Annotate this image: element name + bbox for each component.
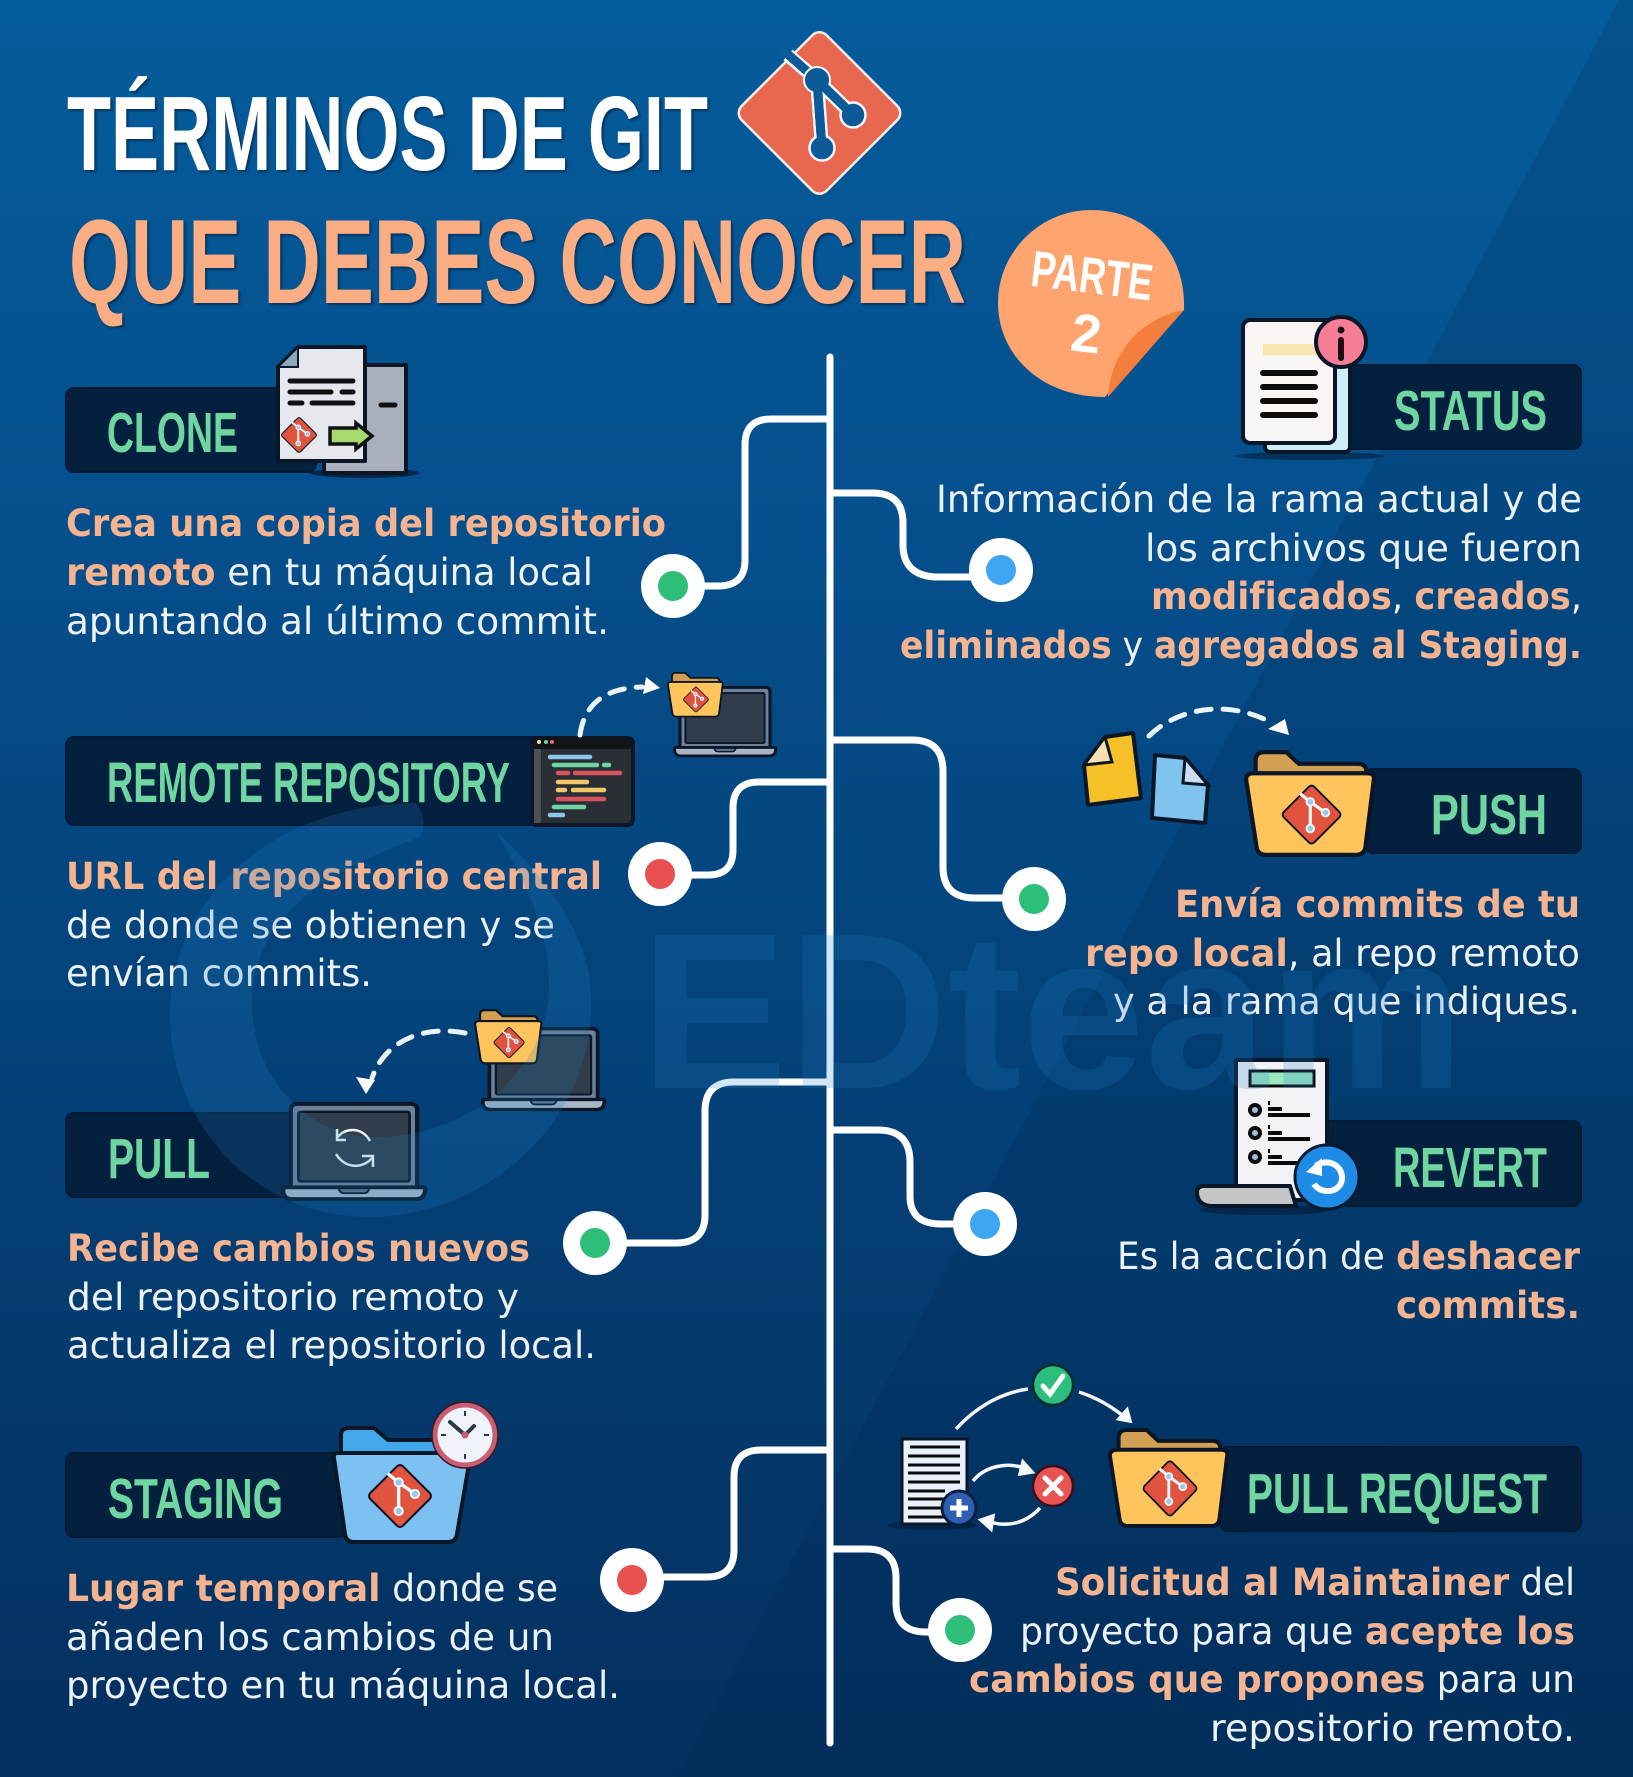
icon: pull request folder <box>1110 1430 1227 1526</box>
label: status: STATUS <box>1394 379 1547 443</box>
text: pull: del repositorio remoto y <box>67 1276 519 1319</box>
text: pull request <box>969 1561 1575 1750</box>
text: revert: commits. <box>1396 1284 1580 1327</box>
arrow: push <box>1149 709 1289 736</box>
icon: git logo <box>735 28 904 198</box>
icon: cross badge <box>1033 1466 1073 1506</box>
panel: clone <box>66 347 666 643</box>
title line 2: QUE DEBES CONOCER <box>69 195 966 329</box>
label: pull: PULL <box>108 1127 210 1191</box>
connector: clone <box>641 419 830 618</box>
text: clone: apuntando al último commit. <box>66 600 609 643</box>
label: staging: STAGING <box>108 1467 283 1531</box>
connector: status <box>830 493 1033 602</box>
label: remote repository: REMOTE REPOSITORY <box>107 751 510 815</box>
panel: push <box>1084 709 1581 1023</box>
icon: file yellow <box>1084 733 1141 805</box>
label: pull request <box>1220 1447 1581 1531</box>
text: status <box>900 478 1582 667</box>
text: clone: remoto en tu máquina local <box>66 551 593 594</box>
text: status: modificados, creados, <box>1151 575 1582 618</box>
text: staging: Lugar temporal donde se <box>66 1567 558 1610</box>
connector: pull request <box>830 1549 992 1662</box>
label: push <box>1365 769 1581 853</box>
sticker: parte 2: PARTE <box>1028 240 1156 311</box>
connector: staging <box>600 1450 830 1612</box>
watermark: EDteam <box>170 803 1465 1217</box>
text: pull request: proyecto para que acepte los <box>1020 1610 1575 1653</box>
sticker: parte 2: 2 <box>1068 303 1105 366</box>
icon: code window <box>532 738 633 825</box>
panel: remote repository <box>66 673 776 995</box>
text: status: eliminados y agregados al Staging. <box>900 624 1582 667</box>
text: pull: Recibe cambios nuevos <box>67 1227 530 1270</box>
connector: pull <box>563 1082 830 1275</box>
label: clone: CLONE <box>107 401 238 465</box>
text: revert <box>1117 1235 1581 1327</box>
icon: file blue <box>1152 755 1208 823</box>
text: push <box>1085 883 1580 1023</box>
panel: revert <box>1117 1060 1581 1327</box>
label: remote repository <box>66 737 546 825</box>
text: status: Información de la rama actual y de <box>936 478 1582 521</box>
text: remote repository: envían commits. <box>66 952 372 995</box>
icon: clone document and server <box>278 347 420 478</box>
label: revert <box>1320 1121 1581 1206</box>
arrows: review flow <box>956 1389 1130 1529</box>
connector: push <box>830 740 1066 931</box>
panel: pull <box>66 1010 604 1367</box>
panel: staging <box>66 1402 620 1707</box>
connector: revert <box>830 1130 1017 1256</box>
panel: pull request <box>887 1365 1581 1750</box>
text: push: Envía commits de tu <box>1175 883 1580 926</box>
label: status <box>1345 365 1581 449</box>
text: push: y a la rama que indiques. <box>1113 980 1580 1023</box>
panel: status <box>900 317 1582 667</box>
icon: staging folder with clock <box>334 1402 498 1542</box>
text: remote repository: URL del repositorio central <box>66 855 602 898</box>
arrow: pull <box>356 1031 465 1094</box>
icon: document with plus <box>887 1439 977 1530</box>
connector: remote repository <box>628 782 830 906</box>
icon: check badge <box>1033 1365 1073 1405</box>
icon: remote laptop with folder <box>668 673 776 756</box>
icon: push folder <box>1246 752 1374 855</box>
text: pull <box>67 1227 596 1367</box>
icon: revert document <box>1197 1060 1359 1215</box>
text: staging: proyecto en tu máquina local. <box>66 1664 620 1707</box>
label: push: PUSH <box>1431 783 1547 847</box>
text: remote repository <box>66 855 602 995</box>
title line 1: TÉRMINOS DE GIT <box>67 75 708 193</box>
text: pull request: Solicitud al Maintainer del <box>1055 1561 1575 1604</box>
text: status: los archivos que fueron <box>1145 527 1582 570</box>
text: push: repo local, al repo remoto <box>1085 932 1580 975</box>
text: remote repository: de donde se obtienen y se <box>66 904 555 947</box>
text: clone <box>66 502 666 643</box>
text: staging <box>66 1567 620 1707</box>
label: clone <box>66 388 316 472</box>
label: staging <box>66 1453 346 1537</box>
icon: local laptop <box>283 1104 425 1199</box>
sticker: parte 2 <box>998 210 1184 397</box>
watermark: EDteam: EDteam <box>640 888 1465 1136</box>
text: staging: añaden los cambios de un <box>66 1616 554 1659</box>
icon: remote laptop with folder <box>475 1010 604 1110</box>
label: pull <box>66 1113 296 1197</box>
text: pull request: cambios que propones para un <box>969 1658 1575 1701</box>
text: pull request: repositorio remoto. <box>1210 1707 1575 1750</box>
text: revert: Es la acción de deshacer <box>1117 1235 1581 1278</box>
arrow: to remote <box>580 677 660 735</box>
icon: status documents <box>1235 317 1385 460</box>
spine <box>826 357 834 1743</box>
label: revert: REVERT <box>1393 1136 1547 1200</box>
text: clone: Crea una copia del repositorio <box>66 502 666 545</box>
text: pull: actualiza el repositorio local. <box>67 1324 596 1367</box>
